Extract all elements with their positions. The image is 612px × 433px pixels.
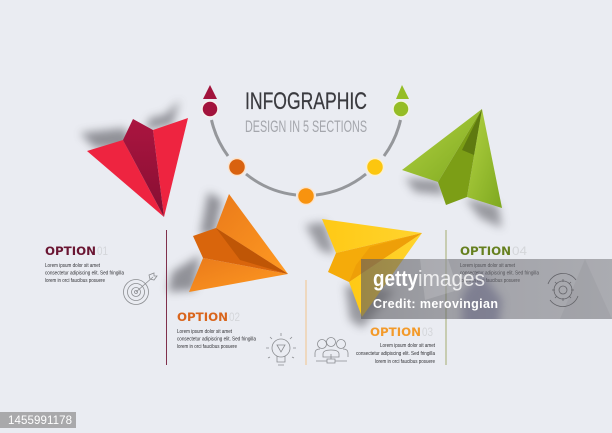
option 1 text block: OPTION [45,244,96,258]
marker: option 2 [228,158,246,176]
title [245,88,367,136]
option 4 text block: OPTION [460,244,511,258]
option 1 text block: 01 [97,244,108,258]
option 4 text block: consectetur adipiscing elit. Sed fringilla [460,270,539,276]
watermark credit: Credit: merovingian [373,297,498,311]
option 4 text block: lorem in orci faucibus posuere [460,278,520,284]
option 4 text block: 04 [512,244,527,258]
option 3 text block: Lorem ipsum dolor sit amet [380,343,435,349]
icon: lightbulb [266,333,296,365]
orange paper plane [168,192,288,292]
option 4 text block: Lorem ipsum dolor sit amet [460,263,515,269]
option 3 text block: 03 [422,325,433,339]
option 2 text block: Lorem ipsum dolor sit amet [177,329,232,335]
marker: option 3 [298,188,314,204]
watermark logo: images [418,266,485,291]
icon: target [124,273,157,304]
green paper plane [402,109,502,228]
icon: people network [315,338,348,363]
option 3 text block: lorem in orci faucibus posuere [375,359,435,365]
marker: option 4 [366,158,384,176]
marker: option 5 [393,85,409,117]
divider lines [166,230,168,365]
option 2 text block [177,310,256,350]
option 2 text block: consectetur adipiscing elit. Sed fringilla [177,336,256,342]
red paper plane [80,100,188,217]
marker: option 1 [202,85,218,117]
option 3 text block: consectetur adipiscing elit. Sed fringilla [356,351,435,357]
option 3 text block [356,325,435,365]
subtitle: DESIGN IN 5 SECTIONS [245,118,367,136]
icon: gear cycle [548,273,578,307]
option 2 text block: 02 [229,310,240,324]
option 1 text block [45,244,124,284]
option 2 text block: OPTION [177,310,228,324]
image id tag [0,412,76,428]
watermark banner [361,259,612,319]
watermark logo [373,266,485,291]
option 1 text block: consectetur adipiscing elit. Sed fringilla [45,270,124,276]
option 1 text block: Lorem ipsum dolor sit amet [45,263,100,269]
timeline arc with markers [202,85,409,204]
watermark logo: getty [373,266,419,291]
image id tag: 1455991178 [8,415,72,427]
option 2 text block: lorem in orci faucibus posuere [177,344,237,350]
option 3 text block: OPTION [370,325,421,339]
option 4 text block [460,244,539,284]
yellow paper plane [305,219,422,328]
title: INFOGRAPHIC [245,88,367,115]
option 1 text block: lorem in orci faucibus posuere [45,278,105,284]
